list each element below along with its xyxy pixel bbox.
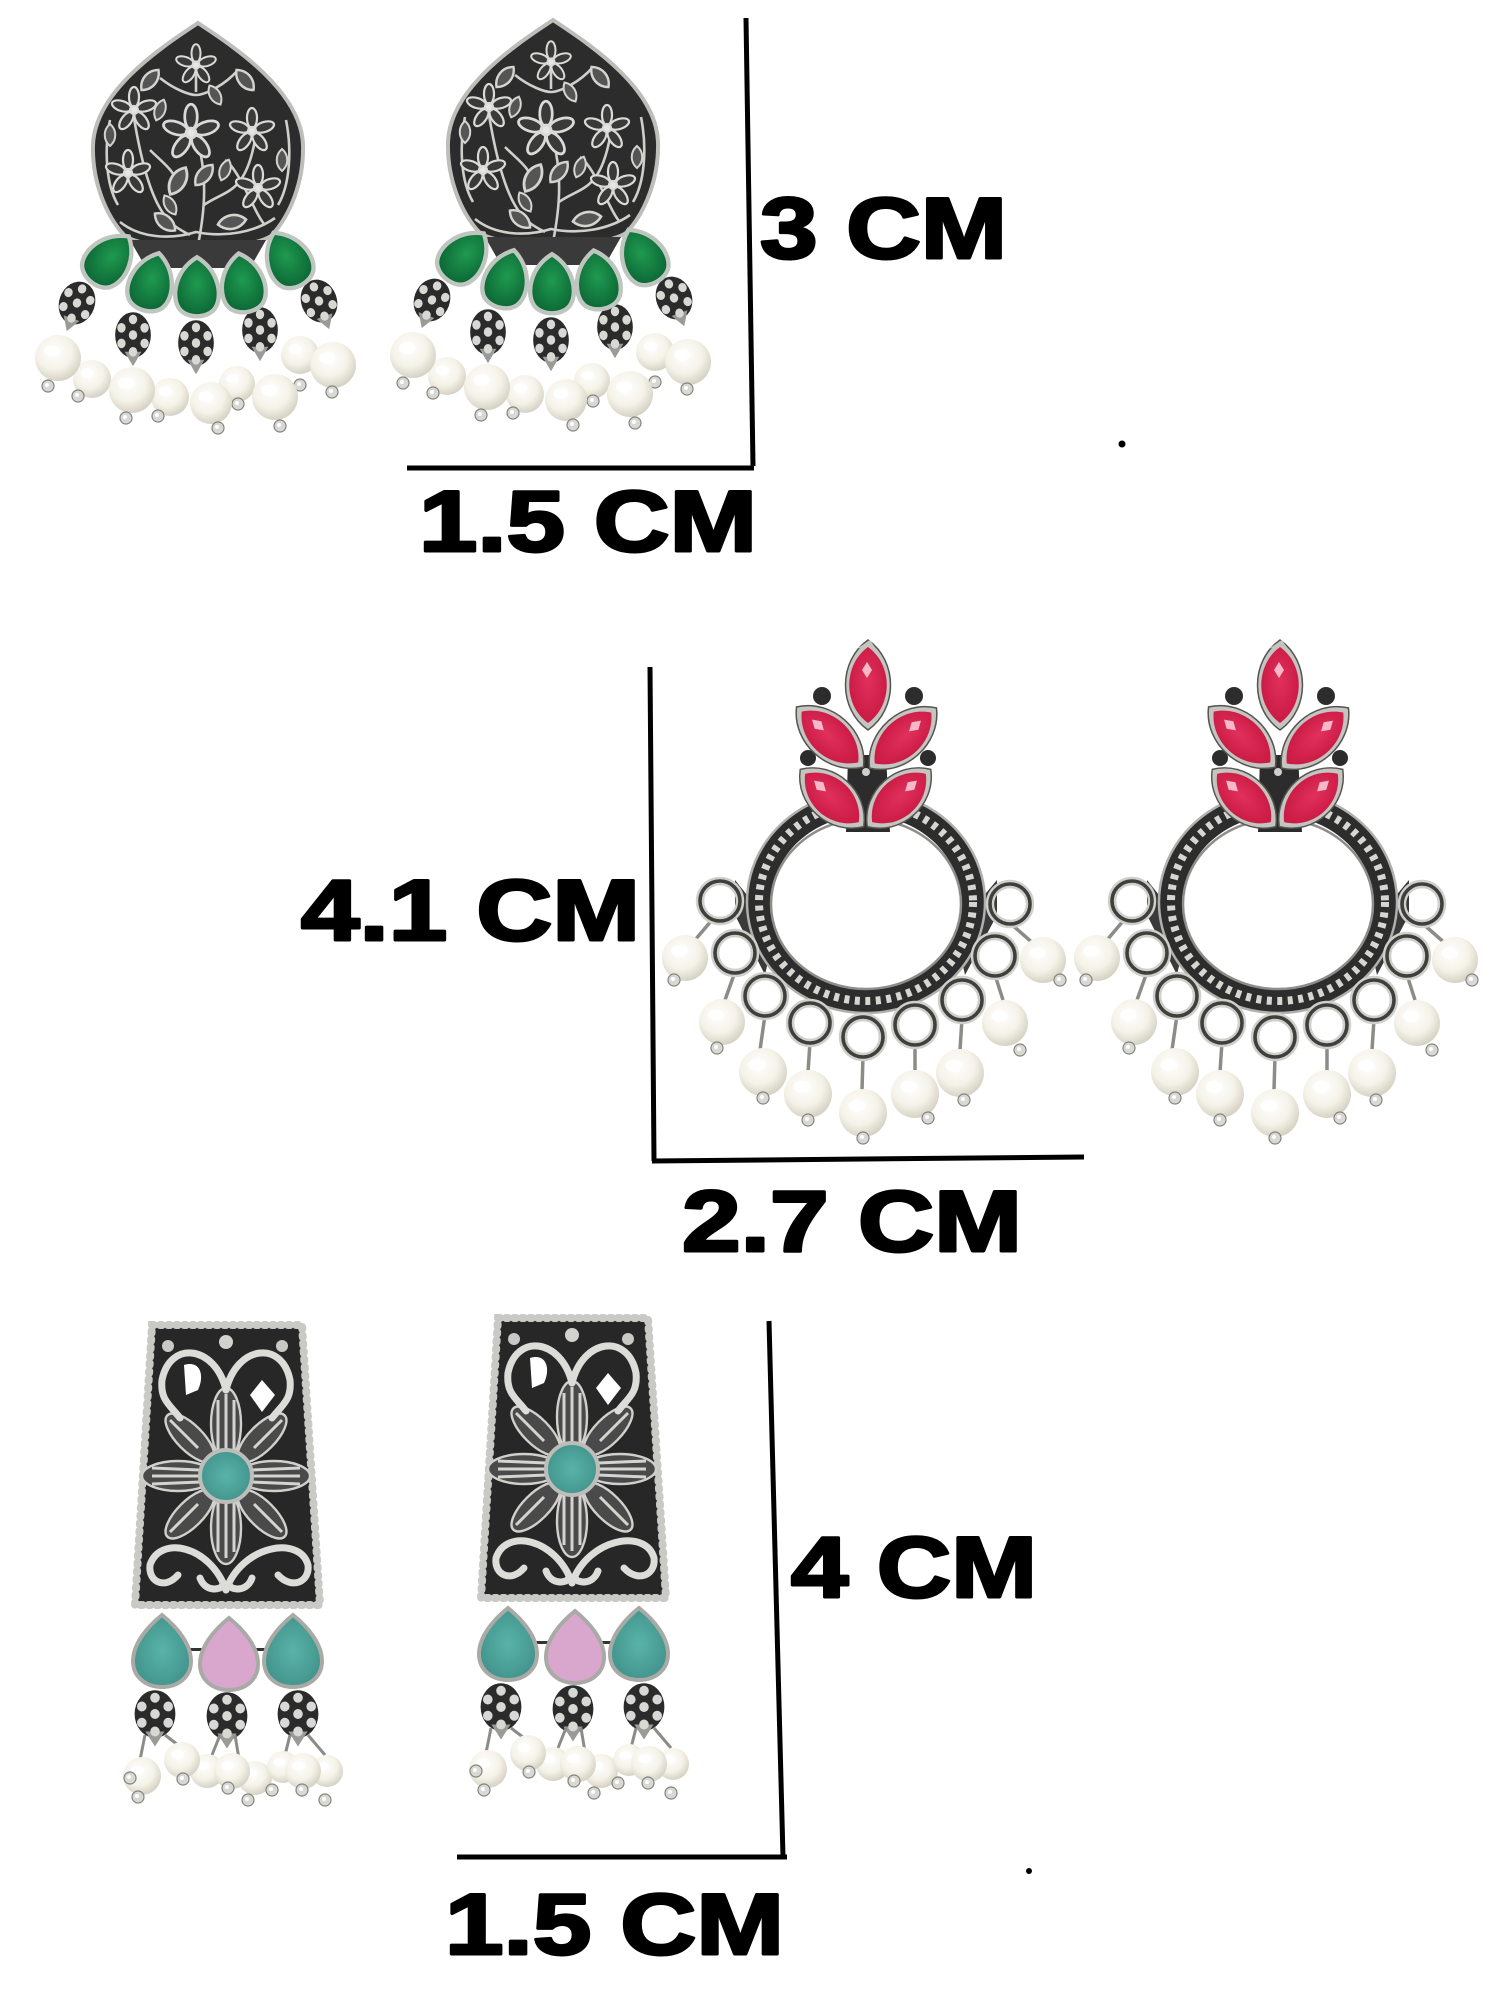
red earring right [1074,640,1478,1144]
height marker line: red earrings [650,667,654,1161]
height label: 4 CM: 4 CM [791,1520,1037,1616]
width marker line: green earrings [407,466,754,470]
height marker line: green earrings [746,18,753,466]
teal earring right [469,1318,689,1799]
width label: 2.7 CM: 2.7 CM [682,1174,1022,1270]
width label: 1.5 CM: 1.5 CM [419,474,757,570]
height label: 4.1 CM: 4.1 CM [301,863,640,959]
width label: 1.5 CM: 1.5 CM [445,1877,784,1973]
height marker line: teal earrings [769,1321,783,1857]
stray dot [1118,440,1126,448]
green earring right [390,20,711,431]
red earring left [662,640,1066,1144]
green earring left [35,23,356,434]
height label: 3 CM: 3 CM [760,181,1007,277]
teal earring left [123,1325,343,1806]
width marker line: red earrings [652,1157,1084,1161]
stray dot [1026,1868,1032,1874]
width marker line: teal earrings [457,1854,787,1860]
